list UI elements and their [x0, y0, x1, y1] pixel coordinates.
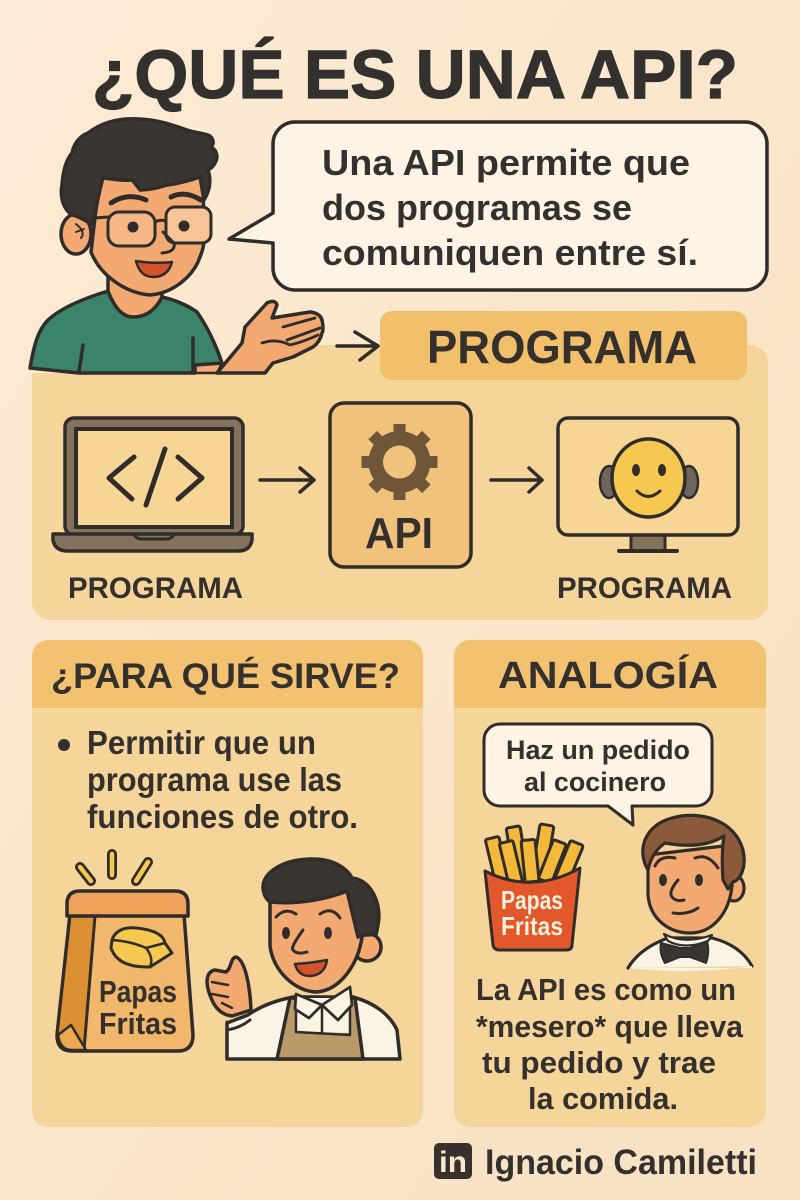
icon: api gear box [330, 403, 471, 567]
heading: programa [380, 311, 747, 380]
speech bubble: order [484, 724, 712, 825]
text: analogy explanation: tu pedido y trae [482, 1045, 716, 1080]
icon: monitor with smiling headset face [558, 418, 738, 551]
speech bubble: definition: comuniquen entre sí. [322, 232, 698, 273]
icon: box of fries: Papas [501, 885, 563, 915]
text: analogy explanation [476, 972, 744, 1116]
character: shop worker with apron [207, 859, 400, 1059]
panel: analogia [454, 640, 766, 1127]
heading: analogia: ANALOGÍA [498, 653, 718, 697]
bullet text: funciones de otro. [87, 798, 358, 835]
label: programa right: PROGRAMA [557, 572, 732, 605]
speech bubble: definition [229, 122, 767, 290]
character: waiter with bow tie [628, 815, 752, 971]
footer: linkedin credit: in [439, 1146, 467, 1179]
bullet text: Permitir que un [87, 724, 316, 761]
icon: box of fries [485, 824, 583, 950]
label: programa left: PROGRAMA [68, 572, 243, 605]
speech bubble: definition: dos programas se [322, 187, 632, 228]
character: man with glasses [30, 119, 323, 373]
heading: programa: PROGRAMA [427, 321, 697, 373]
panel: para que sirve [32, 640, 423, 1127]
arrow: hand to programa [337, 332, 378, 360]
arrow: api to monitor [491, 468, 542, 492]
footer: linkedin credit: Ignacio Camiletti [485, 1143, 757, 1182]
icon: api gear box: API [365, 509, 433, 558]
arrow: laptop to api [260, 468, 314, 492]
speech bubble: order: Haz un pedido [506, 735, 690, 765]
text: analogy explanation: la comida. [528, 1081, 678, 1116]
speech bubble: definition: Una API permite que [322, 142, 690, 183]
icon: laptop with code [53, 418, 252, 551]
icon: paper bag of fries: Fritas [99, 1006, 177, 1041]
text: analogy explanation: *mesero* que lleva [476, 1009, 744, 1044]
bullet text: programa use las [87, 761, 342, 798]
panel: programa diagram [32, 311, 768, 620]
text: analogy explanation: La API es como un [476, 972, 736, 1007]
title: ¿QUÉ ES UNA API? [92, 36, 738, 113]
bullet text [58, 724, 358, 835]
speech bubble: order: al cocinero [524, 767, 666, 797]
icon: paper bag of fries [57, 854, 193, 1051]
icon: paper bag of fries: Papas [99, 974, 177, 1009]
icon: box of fries: Fritas [501, 911, 563, 941]
heading: para que sirve: ¿PARA QUÉ SIRVE? [51, 656, 400, 696]
